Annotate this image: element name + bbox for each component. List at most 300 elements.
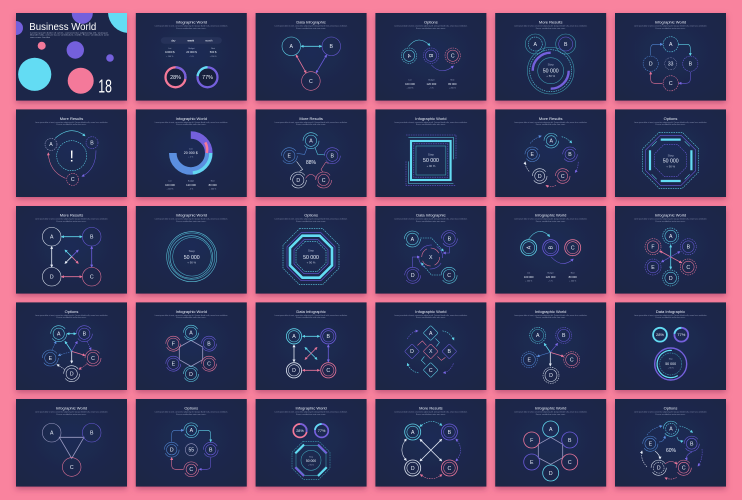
heading: Fusce vestibulum ante non nunc.: [656, 220, 686, 223]
node D: D: [292, 368, 296, 374]
cross lines: [420, 439, 442, 461]
heading: Lorem ipsum dolor sit amet, consectetur adipiscing elit. Quisque blandit nulla, ornare lacus vestibulum.: [155, 25, 228, 28]
heading: Lorem ipsum dolor sit amet, consectetur adipiscing elit. Quisque blandit nulla, ornare lacus vestibulum.: [275, 411, 348, 414]
stat: next: + 200 %: [210, 56, 217, 58]
heading: [634, 405, 708, 416]
heading: Fusce vestibulum ante non nunc.: [296, 27, 327, 30]
panel: Options octagon bars: [615, 109, 726, 197]
stat: list: List: [169, 180, 172, 183]
heading: [514, 309, 588, 319]
diamond X: X: [429, 349, 433, 355]
node B: B: [549, 245, 555, 249]
concentric ring chart: + 90 %: [187, 260, 197, 264]
heading: [35, 116, 109, 126]
node C: C: [682, 466, 686, 472]
panel: Data Infographic donuts and ring: [615, 302, 726, 390]
concentric ring chart: [167, 232, 217, 282]
heading: Fusce vestibulum ante non nunc.: [536, 220, 566, 223]
cycle arrows: [651, 44, 690, 83]
stat: list: + 100 %: [167, 189, 174, 191]
heading: Lorem ipsum dolor sit amet, consectetur adipiscing elit. Quisque blandit nulla, ornare lacus vestibulum.: [35, 121, 109, 124]
stat: budget: [546, 272, 556, 283]
center value: 33: [668, 62, 674, 68]
node C: C: [447, 273, 451, 279]
stat: budget: - 5 %: [189, 189, 194, 191]
heading: Lorem ipsum dolor sit amet, consectetur adipiscing elit. Quisque blandit nulla, ornare lacus vestibulum.: [394, 121, 468, 124]
heading: Lorem ipsum dolor sit amet, consectetur adipiscing elit. Quisque blandit nulla, ornare lacus vestibulum.: [155, 411, 228, 414]
octagon chart: [643, 132, 699, 188]
stat: list: [165, 47, 175, 58]
octagon chart: Step: [668, 154, 674, 158]
stat: list: List: [527, 272, 531, 275]
panel: Data Infographic X hub: [375, 206, 486, 294]
center exclamation: !: [69, 149, 74, 166]
tabs: day week month: week: [187, 38, 195, 42]
stat: next: [210, 47, 217, 58]
panel: More Results four nodes: [16, 206, 127, 294]
heading: Data Infographic: [296, 19, 326, 24]
node A: A: [411, 430, 415, 436]
heading: Lorem ipsum dolor sit amet, consectetur adipiscing elit. Quisque blandit nulla, ornare lacus vestibulum.: [35, 411, 109, 414]
panel: Infographic World five nodes hub: [495, 302, 606, 390]
center value: 55: [189, 448, 194, 454]
stat: budget: 120 000: [546, 275, 556, 279]
node A: A: [189, 330, 193, 336]
node B: B: [568, 152, 572, 158]
heading: [275, 116, 348, 126]
node D: D: [649, 62, 653, 68]
node C: C: [207, 361, 211, 367]
square frame chart: Step: [428, 152, 434, 156]
heading: [394, 405, 468, 416]
node C: C: [326, 368, 330, 374]
heading: More Results: [299, 116, 323, 121]
panel: Options cycle 55: [136, 399, 247, 487]
node E: E: [531, 152, 535, 158]
stat: list: + 100 %: [166, 56, 174, 58]
heading: Lorem ipsum dolor sit amet, consectetur adipiscing elit. Quisque blandit nulla, ornare lacus vestibulum.: [155, 314, 228, 317]
node C: C: [90, 274, 94, 280]
donut: 28%: 28%: [170, 75, 181, 81]
node A: A: [411, 237, 415, 243]
diamond B: B: [448, 349, 452, 355]
node A: A: [49, 142, 53, 148]
node D: D: [189, 372, 193, 378]
arrows between nodes: [296, 46, 327, 73]
heading: Fusce vestibulum ante non nunc.: [656, 316, 686, 319]
node B: B: [209, 448, 213, 454]
heading: [634, 309, 708, 319]
octagon chart: 50 000: [306, 459, 316, 463]
center value: 88%: [306, 160, 317, 166]
panel: Data Infographic triangle: [256, 13, 367, 101]
square frame chart: 50 000: [423, 158, 439, 164]
number 18: 18: [98, 76, 112, 96]
heading: [514, 116, 588, 126]
panel: Infographic World concentric rings: [136, 206, 247, 294]
panel: More Results exclamation: [16, 109, 127, 197]
node C: C: [686, 265, 690, 271]
node A: A: [669, 234, 673, 240]
hexagon: [538, 437, 563, 464]
node B: B: [448, 236, 452, 242]
node A: A: [669, 42, 673, 48]
donut: 77%: 77%: [202, 75, 213, 81]
stat: next: + 200 %: [569, 281, 577, 283]
node C: C: [189, 467, 193, 473]
node D: D: [296, 178, 300, 184]
heading: [394, 116, 468, 126]
dashed outer arcs: [407, 331, 454, 373]
tabs: day week month: month: [205, 38, 213, 42]
panel: Infographic World hexagon dashed: [136, 302, 247, 390]
heading: Fusce vestibulum ante non nunc.: [56, 316, 87, 319]
panel: More Results four nodes cross: [375, 399, 486, 487]
stat: budget: Budget: [428, 79, 435, 82]
heading: Infographic World: [295, 405, 327, 410]
radial arrows: [660, 245, 682, 269]
hexagon: [179, 340, 203, 366]
node X: X: [429, 255, 433, 261]
panel: Infographic World radial chart: [136, 109, 247, 197]
heading: Lorem ipsum dolor sit amet, consectetur adipiscing elit. Quisque blandit nulla, ornare lacus vestibulum.: [35, 218, 109, 221]
ring chart: + 90 %: [668, 368, 674, 370]
heading: Lorem ipsum dolor sit amet, consectetur adipiscing elit. Quisque blandit nulla, ornare lacus vestibulum.: [394, 218, 468, 221]
concentric ring chart: Step: [189, 249, 195, 253]
stat: next: Next: [450, 79, 455, 82]
node C: C: [70, 465, 74, 471]
stat: list: + 100 %: [525, 281, 533, 283]
node D: D: [411, 466, 415, 472]
title: Business World: [29, 22, 96, 33]
tabs: day week month: day: [171, 38, 176, 42]
heading: Options: [424, 19, 438, 24]
panel: Options thick octagon: [256, 206, 367, 294]
heading: Fusce vestibulum ante non nunc.: [656, 27, 686, 30]
node F: F: [172, 341, 175, 347]
stat: list: [405, 79, 415, 89]
heading: Lorem ipsum dolor sit amet, consectetur adipiscing elit. Quisque blandit nulla, ornare lacus vestibulum.: [155, 218, 228, 221]
arrows: [52, 237, 92, 277]
node A: A: [550, 138, 554, 144]
outer arc arrows: [402, 421, 461, 479]
heading: Lorem ipsum dolor sit amet, consectetur adipiscing elit. Quisque blandit nulla, ornare lacus vestibulum.: [634, 314, 708, 317]
heading: Fusce vestibulum ante non nunc.: [656, 123, 686, 126]
heading: Fusce vestibulum ante non nunc.: [536, 27, 566, 30]
heading: [155, 309, 228, 319]
node A: A: [190, 428, 194, 434]
heading: Lorem ipsum dolor sit amet, consectetur adipiscing elit. Quisque blandit nulla, ornare lacus vestibulum.: [35, 314, 109, 317]
heading: Fusce vestibulum ante non nunc.: [296, 220, 327, 223]
heading: Fusce vestibulum ante non nunc.: [536, 123, 566, 126]
octagon chart: + 90 %: [307, 261, 316, 265]
radial bar chart: 20 000 $: [184, 151, 198, 155]
heading: Fusce vestibulum ante non nunc.: [536, 316, 566, 319]
heading: Fusce vestibulum ante non nunc.: [56, 220, 87, 223]
heading: More Results: [539, 116, 562, 121]
text block: cover description: Lorem ipsum dolor sit amet, consectetur adipiscing elit. Quisque: [30, 31, 109, 34]
stat: list: List: [168, 47, 172, 50]
heading: [514, 19, 588, 30]
node A: A: [407, 53, 412, 60]
stat: budget: [427, 79, 437, 89]
node A: A: [50, 430, 54, 436]
stat: next: 80 000: [569, 275, 577, 279]
panel: Data Infographic four nodes double ring: [256, 302, 367, 390]
node D: D: [50, 274, 54, 280]
stat: budget: Budget: [188, 180, 194, 183]
stat: budget: [186, 47, 197, 58]
node C: C: [561, 174, 565, 180]
node E: E: [649, 442, 653, 448]
stat: next: Next: [571, 272, 575, 275]
node D: D: [549, 373, 553, 379]
square frame chart: [406, 135, 456, 186]
heading: Infographic World: [415, 309, 447, 314]
square frame chart: + 90 %: [427, 164, 436, 168]
heading: Fusce vestibulum ante non nunc.: [176, 123, 207, 126]
stat: list: 100 000: [524, 275, 534, 279]
center cross: [305, 347, 317, 359]
heading: Lorem ipsum dolor sit amet, consectetur adipiscing elit. Quisque blandit nulla, ornare lacus vestibulum.: [394, 314, 468, 317]
ring chart: 50 000: [665, 362, 676, 366]
stat: budget: [186, 180, 196, 191]
node E: E: [49, 356, 53, 362]
center value: 60%: [666, 448, 677, 454]
ring chart: 50 000: [543, 69, 559, 75]
node C: C: [448, 466, 452, 472]
perimeter arrows: [52, 334, 91, 369]
hub arrows: [58, 341, 85, 363]
node B: B: [568, 438, 572, 444]
panel: Options five nodes 60%: [615, 399, 726, 487]
heading: Fusce vestibulum ante non nunc.: [416, 123, 447, 126]
arrow: purple arc: [551, 257, 573, 264]
ring chart: [527, 47, 574, 94]
node D: D: [538, 174, 542, 180]
heading: Infographic World: [535, 212, 566, 217]
zigzag connectors: [417, 338, 445, 364]
node A: A: [309, 138, 313, 144]
concentric ring chart: 50 000: [184, 255, 200, 261]
stat: list: List: [409, 79, 412, 82]
donut: 77%: 77%: [677, 332, 686, 337]
panel: More Results five nodes 88%: [256, 109, 367, 197]
node D: D: [411, 273, 415, 279]
panel: Infographic World three circles: [495, 206, 606, 294]
heading: Fusce vestibulum ante non nunc.: [296, 123, 327, 126]
text block: cover description: blandit nulla, ornare lacus vestibulum, mollis. Fusce vestibulum ante: [30, 34, 110, 37]
node B: B: [90, 430, 94, 436]
text block: cover description: non nunc facilisi: [30, 37, 51, 39]
panel: cover Business World: [13, 12, 130, 106]
ring chart: + 50 %: [546, 74, 556, 78]
octagon chart: [292, 441, 330, 479]
octagon chart: 50 000: [303, 255, 319, 261]
heading: Infographic World: [176, 309, 207, 314]
stat: next: + 200 %: [209, 189, 217, 191]
heading: Lorem ipsum dolor sit amet, consectetur adipiscing elit. Quisque blandit nulla, ornare lacus vestibulum.: [514, 314, 588, 317]
node B: B: [83, 331, 87, 337]
heading: Infographic World: [535, 405, 566, 410]
diamond C: C: [429, 368, 433, 374]
heading: Infographic World: [176, 212, 207, 217]
octagon chart: Step: [308, 249, 314, 253]
donut: 28%: 28%: [296, 429, 304, 433]
heading: Data Infographic: [296, 309, 326, 314]
heading: [514, 405, 588, 416]
stat: next: [448, 79, 457, 89]
stat: next: 80 000: [448, 82, 457, 86]
radial bar chart: [173, 135, 211, 173]
node D: D: [70, 371, 74, 377]
heading: Data Infographic: [416, 212, 446, 217]
node B: B: [327, 334, 331, 340]
tabs: day week month: [161, 37, 222, 44]
heading: [394, 19, 468, 30]
diamond D: D: [410, 349, 414, 355]
arrow: purple arc: [431, 65, 453, 71]
stat: list: 10000 $: [165, 50, 175, 54]
node A: A: [536, 333, 540, 339]
node D: D: [657, 466, 661, 472]
node A: A: [290, 44, 294, 50]
node B: B: [448, 430, 452, 436]
heading: Options: [65, 309, 78, 314]
node A: A: [50, 234, 54, 240]
heading: Options: [664, 405, 677, 410]
donut: 77%: 77%: [318, 429, 326, 433]
heading: Fusce vestibulum ante non nunc.: [296, 413, 327, 416]
heading: Infographic World: [655, 19, 686, 24]
node E: E: [288, 154, 292, 160]
stat: budget: - 5 %: [429, 87, 434, 89]
panel: Infographic World tabs and donuts: [136, 13, 247, 101]
node A: A: [292, 334, 296, 340]
ring chart: Step: [548, 62, 554, 66]
heading: [155, 19, 228, 30]
heading: Fusce vestibulum ante non nunc.: [176, 316, 207, 319]
heading: Lorem ipsum dolor sit amet, consectetur adipiscing elit. Quisque blandit nulla, ornare lacus vestibulum.: [275, 218, 348, 221]
heading: Lorem ipsum dolor sit amet, consectetur adipiscing elit. Quisque blandit nulla, ornare lacus vestibulum.: [634, 218, 708, 221]
stat: budget: - 5 %: [189, 56, 194, 58]
node F: F: [530, 438, 533, 444]
panel: More Results rings: [495, 13, 606, 101]
heading: Fusce vestibulum ante non nunc.: [176, 220, 207, 223]
node B: B: [331, 154, 335, 160]
node B: B: [562, 333, 566, 339]
node C: C: [71, 177, 75, 183]
node D: D: [170, 448, 174, 454]
heading: Fusce vestibulum ante non nunc.: [296, 316, 327, 319]
octagon chart: + 90 %: [666, 165, 676, 169]
heading: Infographic World: [56, 405, 87, 410]
donut: 28%: 28%: [656, 332, 664, 337]
stat: budget: 120 000: [186, 183, 196, 187]
heading: [35, 212, 109, 223]
octagon chart: 50 000: [663, 159, 679, 165]
stat: budget: Budget: [548, 272, 554, 275]
panel: Infographic World cycle 33: [615, 13, 726, 101]
icon: decorative cover circles: [16, 13, 127, 94]
heading: Lorem ipsum dolor sit amet, consectetur adipiscing elit. Quisque blandit nulla, ornare lacus vestibulum.: [155, 121, 228, 124]
node B: B: [90, 234, 94, 240]
heading: More Results: [60, 116, 83, 121]
heading: [35, 405, 109, 416]
node B: B: [90, 140, 94, 146]
heading: [275, 212, 348, 223]
node B: B: [564, 42, 568, 48]
node B: B: [687, 244, 691, 250]
node B: B: [689, 62, 693, 68]
heading: Fusce vestibulum ante non nunc.: [176, 27, 207, 30]
heading: Infographic World: [655, 212, 686, 217]
node A: A: [549, 427, 553, 433]
stat: next: Next: [211, 47, 216, 50]
panel: Options three circles: [375, 13, 486, 101]
heading: [155, 212, 228, 223]
heading: Lorem ipsum dolor sit amet, consectetur adipiscing elit. Quisque blandit nulla, ornare lacus vestibulum.: [514, 411, 588, 414]
node C: C: [669, 81, 673, 87]
heading: [634, 116, 708, 126]
heading: [394, 212, 468, 223]
stat: budget: 20 000 $: [186, 50, 197, 54]
stat: budget: Budget: [189, 47, 195, 50]
node B: B: [427, 54, 433, 58]
heading: Fusce vestibulum ante non nunc.: [416, 27, 447, 30]
panel: Options five nodes hub: [16, 302, 127, 390]
heading: More Results: [60, 212, 83, 217]
heading: Lorem ipsum dolor sit amet, consectetur adipiscing elit. Quisque blandit nulla, ornare lacus vestibulum.: [514, 25, 588, 28]
node E: E: [651, 265, 655, 271]
node C: C: [570, 357, 574, 363]
heading: Lorem ipsum dolor sit amet, consectetur adipiscing elit. Quisque blandit nulla, ornare lacus vestibulum.: [634, 121, 708, 124]
heading: Lorem ipsum dolor sit amet, consectetur adipiscing elit. Quisque blandit nulla, ornare lacus vestibulum.: [514, 121, 588, 124]
node C: C: [451, 54, 455, 60]
stat: next: 500 $: [210, 50, 217, 54]
node D: D: [549, 471, 553, 477]
node C: C: [91, 356, 95, 362]
node B: B: [330, 44, 334, 50]
panel: More Results five node cycle: [495, 109, 606, 197]
hub arrows: [537, 343, 564, 366]
heading: [155, 405, 228, 416]
node E: E: [172, 361, 176, 367]
heading: Infographic World: [176, 19, 207, 24]
stat: list: [524, 272, 534, 283]
node F: F: [651, 244, 655, 250]
heading: Options: [664, 116, 677, 121]
stat: list: [165, 180, 175, 191]
stat: next: [569, 272, 577, 283]
heading: Lorem ipsum dolor sit amet, consectetur adipiscing elit. Quisque blandit nulla, ornare lacus vestibulum.: [275, 25, 348, 28]
heading: More Results: [539, 19, 562, 24]
heading: Lorem ipsum dolor sit amet, consectetur adipiscing elit. Quisque blandit nulla, ornare lacus vestibulum.: [514, 218, 588, 221]
node E: E: [530, 460, 534, 466]
node C: C: [309, 79, 313, 85]
node E: E: [528, 357, 532, 363]
heading: Fusce vestibulum ante non nunc.: [536, 413, 566, 416]
panel: Infographic World donuts and octagon: [256, 399, 367, 487]
heading: [394, 309, 468, 319]
node C: C: [322, 178, 326, 184]
stat: next: [209, 180, 217, 191]
heading: Options: [184, 405, 198, 410]
cycle arrows: [172, 430, 211, 469]
heading: Fusce vestibulum ante non nunc.: [416, 413, 447, 416]
heading: Infographic World: [176, 116, 207, 121]
star connectors: [297, 148, 329, 178]
